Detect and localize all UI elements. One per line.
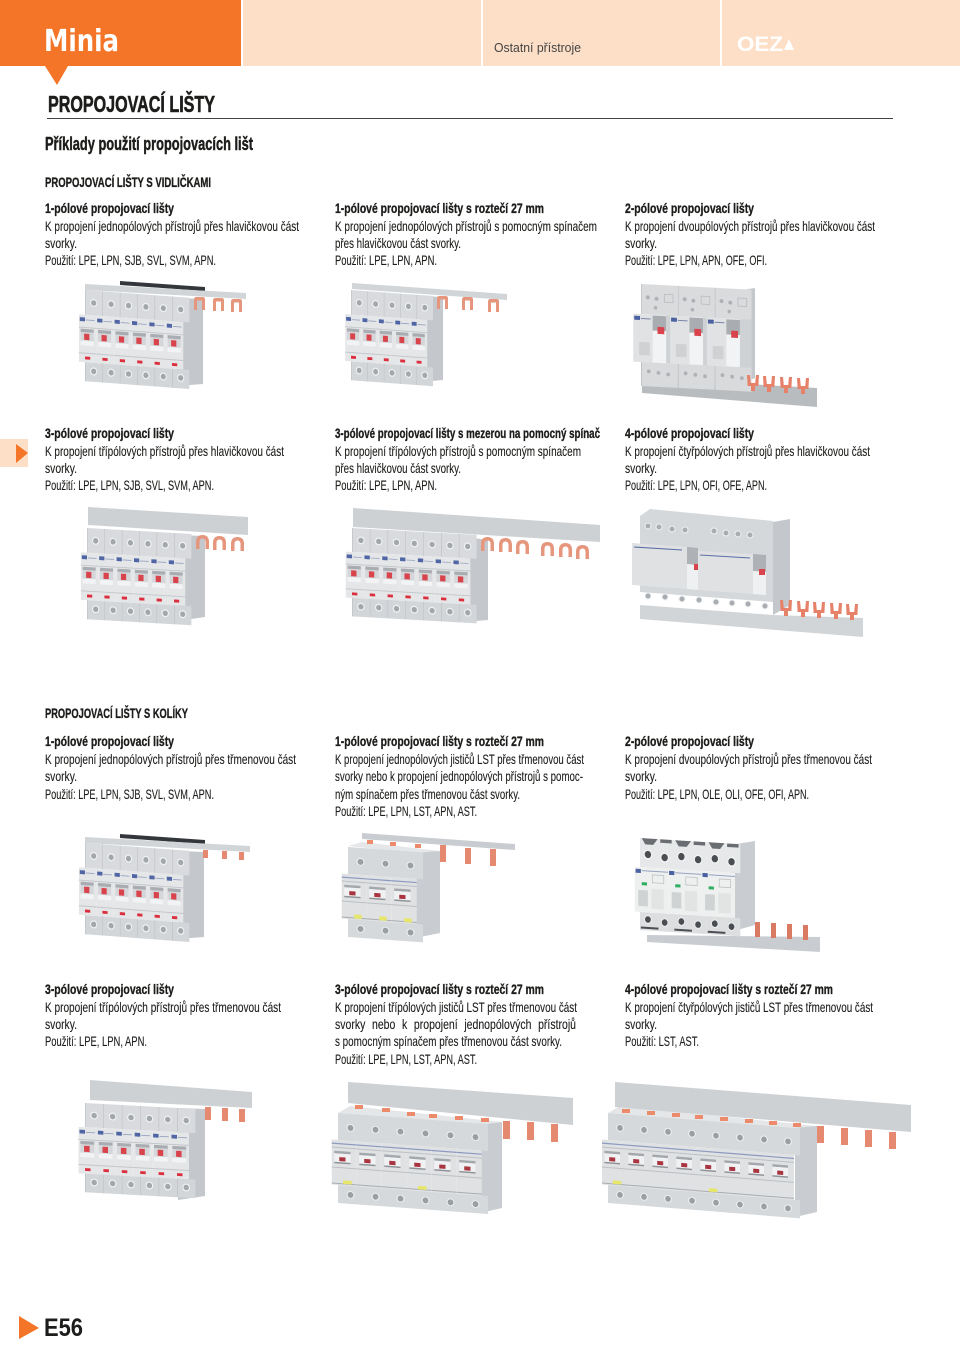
- subtitle: Příklady použití propojovacích lišt: [45, 134, 253, 154]
- section heading: pins: PROPOJOVACÍ LIŠTY S KOLÍKY: [45, 704, 188, 721]
- text: 4-pole pins 27 mm: Použití: LST, AST.: [625, 1033, 699, 1049]
- product name: Minia: [44, 24, 119, 59]
- text: 1-pole pins: [45, 733, 296, 802]
- image: 4-pole fork busbar on two devices: [632, 509, 863, 637]
- forks: [780, 600, 858, 620]
- text: 2-pole forks: Použití: LPE, LPN, APN, OFE, OFI.: [625, 252, 767, 268]
- text: 1-pole forks 27 mm: 1-pólové propojovací lišty s roztečí 27 mm: [335, 200, 544, 216]
- section heading: forks: PROPOJOVACÍ LIŠTY S VIDLIČKAMI: [45, 173, 211, 190]
- text: 3-pole forks: Použití: LPE, LPN, SJB, SVL, SVM, APN.: [45, 477, 214, 493]
- image: 4-pole pin busbar on eight LST breakers: [602, 1082, 911, 1218]
- bottom bar: [640, 605, 863, 637]
- text: 3-pole forks: [45, 425, 284, 493]
- text: 3-pole forks with gap: [335, 425, 600, 493]
- image: 1-pin busbar on three devices: [342, 833, 515, 942]
- text: 4-pole forks: Použití: LPE, LPN, OFI, OFE, APN.: [625, 477, 767, 493]
- page number: [19, 1314, 83, 1342]
- logo: OEZ: [737, 33, 783, 56]
- text: 1-pole pins 27 mm: [335, 733, 584, 819]
- text: 1-pole pins 27 mm: ným spínačem přes třmenovou část svorky.: [335, 786, 520, 802]
- text: 3-pole pins 27 mm: svorky nebo k propojení jednopólových přístrojů: [335, 1016, 576, 1032]
- text: 1-pole pins 27 mm: 1-pólové propojovací lišty s roztečí 27 mm: [335, 733, 544, 749]
- text: 3-pole forks with gap: přes hlavičkovou část svorky.: [335, 460, 461, 476]
- text: 3-pole pins: svorky.: [45, 1016, 77, 1032]
- text: 3-pole pins 27 mm: K propojení třípólových jističů LST přes třmenovou část: [335, 999, 577, 1015]
- text: 2-pole pins: [625, 733, 872, 802]
- text: 2-pole forks: 2-pólové propojovací lišty: [625, 200, 754, 216]
- text: 2-pole pins: 2-pólové propojovací lišty: [625, 733, 754, 749]
- text: 2-pole forks: svorky.: [625, 235, 657, 251]
- side panel: [773, 519, 790, 615]
- side marker: [0, 439, 28, 467]
- text: 3-pole forks with gap: 3-pólové propojovací lišty s mezerou na pomocný spínač: [335, 425, 600, 441]
- image: 3-pole fork busbar with gap: [346, 508, 600, 623]
- text: 1-pole forks: Použití: LPE, LPN, SJB, SVL, SVM, APN.: [45, 252, 216, 268]
- back block: [640, 509, 773, 602]
- text: 3-pole pins 27 mm: s pomocným spínačem přes třmenovou část svorky.: [335, 1033, 562, 1049]
- text: 3-pole pins: 3-pólové propojovací lišty: [45, 981, 174, 997]
- text: 3-pole pins: Použití: LPE, LPN, APN.: [45, 1033, 147, 1049]
- text: 1-pole pins: K propojení jednopólových přístrojů přes třmenovou část: [45, 751, 296, 767]
- text: 1-pole pins: svorky.: [45, 768, 77, 784]
- text: 3-pole forks with gap: K propojení třípólových přístrojů s pomocným spínačem: [335, 443, 581, 459]
- text: 3-pole pins 27 mm: 3-pólové propojovací lišty s roztečí 27 mm: [335, 981, 544, 997]
- text: 3-pole forks: 3-pólové propojovací lišty: [45, 425, 174, 441]
- text: 2-pole pins: Použití: LPE, LPN, OLE, OLI, OFE, OFI, APN.: [625, 786, 809, 802]
- text: 3-pole pins: [45, 981, 281, 1049]
- text: 3-pole pins 27 mm: Použití: LPE, LPN, LST, APN, AST.: [335, 1051, 477, 1067]
- front right: [698, 551, 753, 594]
- image: 2-pole fork busbar on residual current devices: [633, 284, 817, 407]
- text: 3-pole forks with gap: Použití: LPE, LPN, APN.: [335, 477, 437, 493]
- text: 1-pole pins 27 mm: K propojení jednopólových jističů LST přes třmenovou část: [335, 751, 584, 767]
- text: 3-pole pins: K propojení třípólových přístrojů přes třmenovou část: [45, 999, 281, 1015]
- text: 4-pole forks: svorky.: [625, 460, 657, 476]
- text: 1-pole pins: 1-pólové propojovací lišty: [45, 733, 174, 749]
- page number: E56: [44, 1314, 83, 1342]
- text: 1-pole forks 27 mm: Použití: LPE, LPN, APN.: [335, 252, 437, 268]
- text: 4-pole forks: 4-pólové propojovací lišty: [625, 425, 754, 441]
- text: 2-pole forks: [625, 200, 875, 268]
- text: 1-pole pins 27 mm: Použití: LPE, LPN, LST, APN, AST.: [335, 803, 477, 819]
- text: 1-pole forks: K propojení jednopólových přístrojů přes hlavičkovou část: [45, 218, 299, 234]
- front left: [632, 543, 687, 589]
- text: 1-pole forks 27 mm: K propojení jednopólových přístrojů s pomocným spínačem: [335, 218, 597, 234]
- header band: [0, 0, 960, 85]
- text: 1-pole forks: [45, 200, 299, 268]
- image: 3-pole fork busbar on six devices: [81, 507, 248, 625]
- image: 2-pole pin busbar on combined devices: [635, 838, 820, 952]
- text: 1-pole forks 27 mm: přes hlavičkovou část svorky.: [335, 235, 461, 251]
- text: 1-pole forks: 1-pólové propojovací lišty: [45, 200, 174, 216]
- text: 4-pole pins 27 mm: 4-pólové propojovací lišty s roztečí 27 mm: [625, 981, 833, 997]
- text: 4-pole pins 27 mm: svorky.: [625, 1016, 657, 1032]
- text: 3-pole forks: K propojení třípólových přístrojů přes hlavičkovou část: [45, 443, 284, 459]
- image: 3-pole pin busbar on six LST breakers: [332, 1082, 573, 1214]
- image: 1-pole fork busbar on six devices: [79, 281, 246, 389]
- text: 3-pole pins 27 mm: [335, 981, 577, 1067]
- text: 2-pole pins: svorky.: [625, 768, 657, 784]
- text: 4-pole pins 27 mm: [625, 981, 873, 1049]
- text: 1-pole forks: svorky.: [45, 235, 77, 251]
- page title: PROPOJOVACÍ LIŠTY: [48, 90, 215, 117]
- terminal screws: [645, 523, 768, 609]
- text: 1-pole forks 27 mm: [335, 200, 597, 268]
- text: 4-pole forks: [625, 425, 870, 493]
- orange tab: [0, 0, 241, 85]
- image: 1-pole pin busbar on six devices: [79, 834, 250, 942]
- section name: Ostatní přístroje: [494, 40, 581, 55]
- text: 1-pole pins: Použití: LPE, LPN, SJB, SVL, SVM, APN.: [45, 786, 214, 802]
- text: 3-pole forks: svorky.: [45, 460, 77, 476]
- image: 3-pole pin busbar on six devices: [79, 1080, 252, 1200]
- image: 1-pole fork busbar 27 mm on five devices: [345, 283, 507, 386]
- text: 1-pole pins 27 mm: svorky nebo k propojení jednopólových přístrojů s pomoc-: [335, 768, 583, 784]
